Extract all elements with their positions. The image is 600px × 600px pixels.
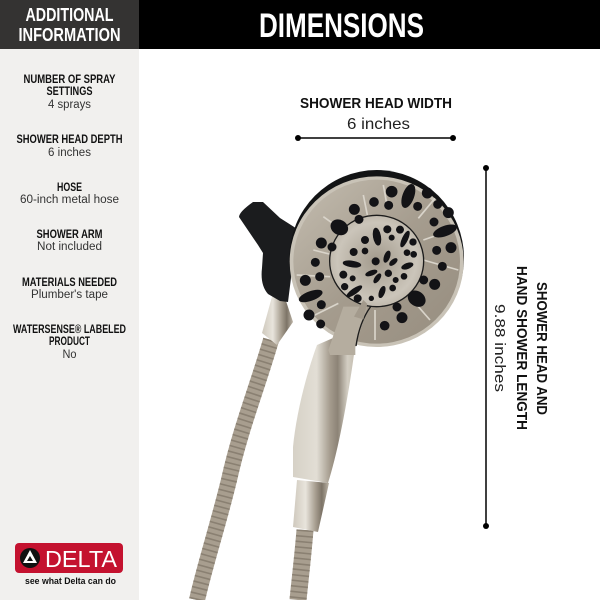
logo: delta <box>15 543 123 587</box>
header: additional information <box>0 0 139 49</box>
hose: hand shower hose <box>298 530 305 600</box>
dimension: shower head width: SHOWER HEAD WIDTH <box>300 95 452 112</box>
spec: shower arm: SHOWER ARM <box>36 227 103 241</box>
mount collar <box>262 293 293 345</box>
header: additional information: ADDITIONAL <box>26 5 114 25</box>
spec: watersense labeled product <box>13 322 126 361</box>
neck <box>328 307 367 355</box>
spec: hose: 60-inch metal hose <box>20 194 119 206</box>
logo: delta: see what Delta can do <box>25 576 116 587</box>
spec: number of spray settings: NUMBER OF SPRAY <box>24 72 116 86</box>
face ribs <box>297 185 458 340</box>
spec: materials needed <box>22 275 117 301</box>
spec: materials needed: Plumber's tape <box>31 289 108 301</box>
spec: number of spray settings: SETTINGS <box>46 84 92 98</box>
dimension: shower head and hand shower length: HAND SHOWER LENGTH <box>513 266 530 430</box>
dimension: shower head and hand shower length: SHOWER HEAD AND <box>533 282 550 415</box>
spec: shower head depth: 6 inches <box>48 147 91 159</box>
spec: hose: HOSE <box>57 180 82 194</box>
spec: number of spray settings: 4 sprays <box>48 99 91 111</box>
spec: watersense labeled product: PRODUCT <box>49 334 90 348</box>
spec: watersense labeled product: No <box>62 349 76 361</box>
head back rim <box>289 170 464 346</box>
inner spray ring <box>330 215 424 307</box>
spec: number of spray settings <box>24 72 116 111</box>
panel: additional information background <box>0 0 139 600</box>
header: dimensions title <box>139 0 600 49</box>
header: dimensions title: DIMENSIONS <box>259 7 424 45</box>
spec: watersense labeled product: WATERSENSE® LABELED <box>13 322 126 336</box>
spec: hose <box>20 180 119 206</box>
neck slit <box>356 307 371 346</box>
shower head face <box>289 170 464 355</box>
dimension: shower head and hand shower length: 9.88 inches <box>491 304 508 392</box>
dimension: shower head width: 6 inches <box>347 116 410 133</box>
spec: shower arm <box>36 227 103 253</box>
spec: shower arm: Not included <box>37 241 102 253</box>
dimension: shower head width <box>295 95 456 141</box>
inner nozzles <box>340 226 417 302</box>
outer face <box>290 176 464 347</box>
spec: materials needed: MATERIALS NEEDED <box>22 275 117 289</box>
product: shower head and hand shower <box>197 170 464 600</box>
spec: shower head depth: SHOWER HEAD DEPTH <box>16 132 122 146</box>
logo: delta: DELTA <box>45 546 118 572</box>
handle collar <box>293 480 329 532</box>
spec: shower head depth <box>16 132 122 159</box>
dimension: shower head and hand shower length <box>483 165 550 529</box>
hose: mount hose <box>197 340 271 600</box>
outer nozzles <box>298 183 458 330</box>
header: additional information: INFORMATION <box>18 25 120 45</box>
hand shower handle <box>293 335 355 483</box>
black ball connector <box>239 202 302 302</box>
